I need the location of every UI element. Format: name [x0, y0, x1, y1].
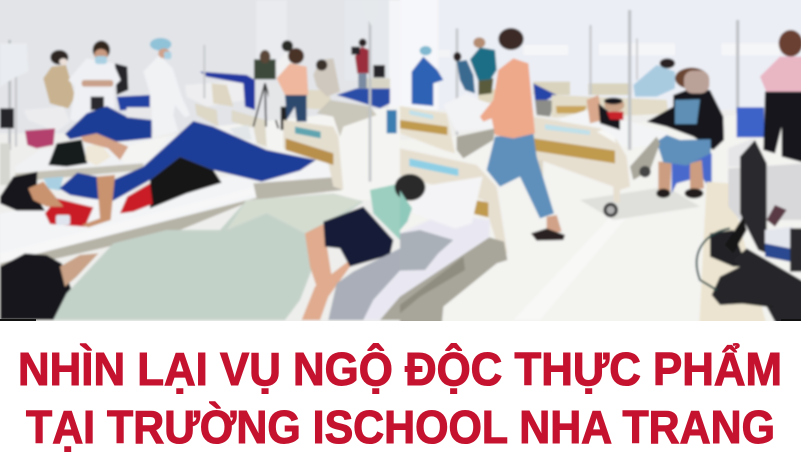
wall panels	[524, 46, 567, 54]
blue-shirt person leaning on back bed	[633, 65, 675, 97]
blue nurse	[412, 57, 443, 106]
back beds	[186, 81, 244, 106]
IV poles	[369, 0, 371, 182]
second bed	[122, 126, 254, 143]
title	[18, 343, 782, 453]
back patient	[26, 108, 68, 130]
blue blanket over student	[59, 121, 316, 201]
beige visitor	[43, 65, 75, 108]
teal man and companion	[457, 60, 475, 93]
blue blanket behind doctor	[117, 95, 150, 111]
seated woman	[672, 153, 712, 193]
walking woman	[487, 133, 554, 218]
front student with grey-green blanket	[0, 253, 72, 320]
doctor	[115, 63, 128, 95]
title line 1: NHÌN LẠI VỤ NGỘ ĐỘC THỰC PHẨM	[18, 343, 782, 395]
front bed end by the pillar	[400, 148, 507, 253]
foreground desk with monitor and phone	[699, 182, 767, 325]
left bed	[449, 97, 492, 132]
second bed in the back	[552, 95, 668, 117]
back beds	[533, 82, 570, 95]
photo: hospital ward with students on beds	[0, 0, 801, 326]
tripod and camera crew	[253, 83, 278, 128]
left half of ward scene	[0, 0, 400, 320]
IV poles	[456, 28, 458, 135]
central bed footboard	[533, 117, 630, 203]
student in red shirt	[150, 157, 222, 208]
nurse	[143, 55, 190, 137]
IV pole over central bed	[628, 10, 631, 150]
pink-shirt bystander	[737, 107, 764, 137]
middle bed mattress and frame	[1, 172, 304, 252]
footboard of middle bed	[283, 120, 343, 190]
right half of ward scene	[395, 0, 801, 325]
patient on central bed	[562, 109, 624, 124]
photo edge corners	[0, 319, 801, 321]
child on front bed	[370, 183, 400, 240]
